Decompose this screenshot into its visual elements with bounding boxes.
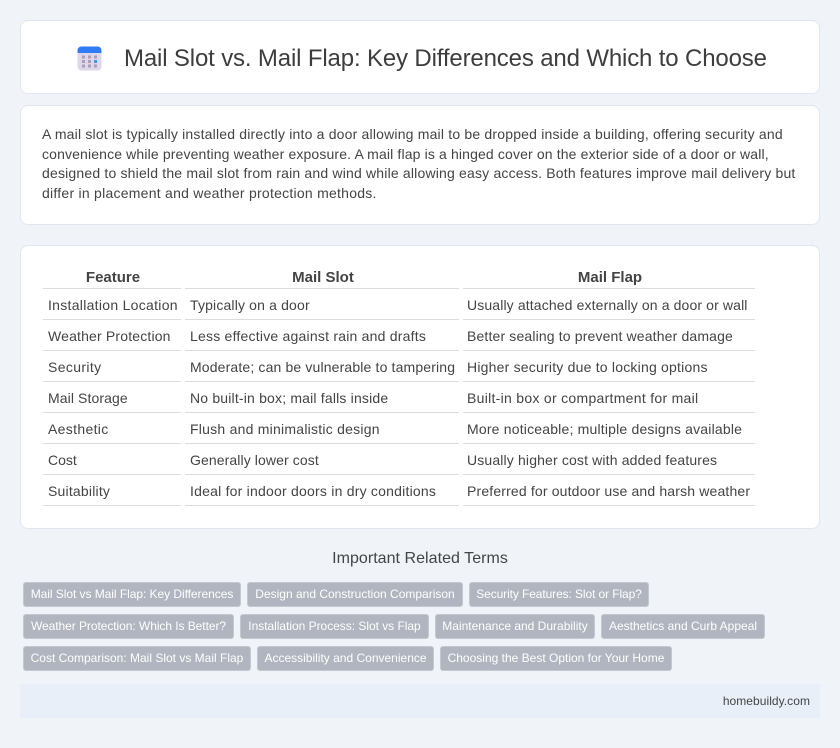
row: security xyxy=(48,359,708,375)
row: security: Security xyxy=(48,359,102,375)
row: mail storage: Mail Storage xyxy=(48,390,128,406)
row: cost: Generally lower cost xyxy=(190,452,319,468)
row: mail storage: Built-in box or compartment for mail xyxy=(467,390,698,406)
row: aesthetic: More noticeable; multiple designs available xyxy=(467,421,742,437)
row: suitability: Ideal for indoor doors in dry conditions xyxy=(190,483,436,499)
text block: intro paragraph: convenience while preventing weather exposure. A mail flap is a hinged cover on the exterior side of a door or wall, xyxy=(42,146,769,162)
row: mail storage xyxy=(48,390,698,406)
table header: mail flap: Mail Flap xyxy=(578,269,642,286)
row: installation location: Typically on a door xyxy=(190,297,310,313)
text block: intro paragraph: A mail slot is typically installed directly into a door allowing mail to be dropped inside a building, offering security and xyxy=(42,126,783,142)
tag xyxy=(435,614,595,638)
row: cost: Usually higher cost with added features xyxy=(467,452,717,468)
row: cost: Cost xyxy=(48,452,77,468)
row: security: Moderate; can be vulnerable to tampering xyxy=(190,359,455,375)
tag xyxy=(601,614,765,638)
row: suitability: Preferred for outdoor use and harsh weather xyxy=(467,483,750,499)
icon: calendar xyxy=(78,46,102,70)
tag: Mail Slot vs Mail Flap: Key Differences xyxy=(31,586,233,600)
footer bar xyxy=(20,684,820,718)
footer text: homebuildy.com xyxy=(723,694,810,708)
tag xyxy=(247,582,463,606)
tag: Cost Comparison: Mail Slot vs Mail Flap xyxy=(31,650,243,664)
tag: Security Features: Slot or Flap? xyxy=(476,586,642,600)
text block: intro paragraph: differ in placement and weather protection methods. xyxy=(42,185,377,201)
tag xyxy=(23,582,241,606)
tag: Installation Process: Slot vs Flap xyxy=(248,618,421,632)
tag xyxy=(23,646,251,670)
heading: important related terms: Important Related Terms xyxy=(332,550,508,567)
row: aesthetic: Flush and minimalistic design xyxy=(190,421,380,437)
tag: Aesthetics and Curb Appeal xyxy=(609,618,757,632)
row: security: Higher security due to locking options xyxy=(467,359,708,375)
row: weather protection xyxy=(48,328,733,344)
tag: Maintenance and Durability xyxy=(442,618,588,632)
table header: feature: Feature xyxy=(86,269,140,286)
tag xyxy=(240,614,429,638)
tag xyxy=(23,614,234,638)
title: Mail Slot vs. Mail Flap: Key Differences and Which to Choose xyxy=(124,45,767,72)
panel: intro text xyxy=(20,105,820,225)
tag: Weather Protection: Which Is Better? xyxy=(31,618,226,632)
row: suitability xyxy=(48,483,750,499)
row: weather protection: Weather Protection xyxy=(48,328,171,344)
row: suitability: Suitability xyxy=(48,483,110,499)
panel: title header xyxy=(20,20,820,94)
panel: comparison table xyxy=(20,245,820,529)
row: cost xyxy=(48,452,717,468)
row: aesthetic: Aesthetic xyxy=(48,421,109,437)
text block: intro paragraph xyxy=(42,126,796,201)
row: installation location: Usually attached externally on a door or wall xyxy=(467,297,748,313)
tag xyxy=(469,582,649,606)
row: weather protection: Less effective against rain and drafts xyxy=(190,328,426,344)
row: mail storage: No built-in box; mail falls inside xyxy=(190,390,388,406)
tag xyxy=(440,646,672,670)
table header: mail slot: Mail Slot xyxy=(292,269,354,286)
tag: Accessibility and Convenience xyxy=(264,650,427,664)
row: weather protection: Better sealing to prevent weather damage xyxy=(467,328,733,344)
row: installation location xyxy=(48,297,748,313)
tag: Design and Construction Comparison xyxy=(255,586,455,600)
tag: Choosing the Best Option for Your Home xyxy=(448,650,664,664)
row: aesthetic xyxy=(48,421,742,437)
tag xyxy=(257,646,434,670)
row: installation location: Installation Location xyxy=(48,297,178,313)
text block: intro paragraph: designed to shield the mail slot from rain and wind while allowing easy access. Both features improve mail delivery but xyxy=(42,165,796,181)
